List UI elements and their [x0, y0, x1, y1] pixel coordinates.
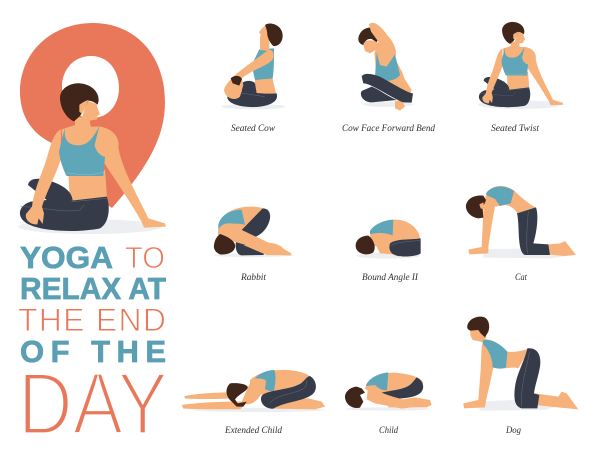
- title line: of the: OF THE: [20, 334, 166, 369]
- title line: yoga to: [20, 240, 165, 275]
- pose: child: [345, 372, 432, 411]
- pose: seated cow: [221, 23, 285, 109]
- pose: seated twist: [478, 22, 563, 109]
- title line: yoga to: YOGA: [20, 240, 113, 275]
- pose: rabbit: [213, 207, 293, 257]
- pose: bound angle II: [356, 220, 421, 259]
- big number nine: [20, 23, 165, 208]
- label: rabbit: Rabbit: [240, 273, 266, 283]
- pose: dog: [463, 317, 578, 411]
- title line: the end: THE END: [18, 302, 166, 338]
- label: seated twist: Seated Twist: [491, 124, 539, 134]
- label: extended child: Extended Child: [224, 426, 282, 436]
- title: [18, 240, 168, 453]
- pose: cow face forward bend: [358, 23, 413, 111]
- label: cow face forward bend: Cow Face Forward Bend: [342, 124, 435, 134]
- label: child: Child: [379, 426, 398, 436]
- label: dog: Dog: [505, 426, 521, 436]
- pose: cat: [466, 186, 576, 258]
- title line: day: DAY: [18, 354, 168, 453]
- label: cat: Cat: [515, 273, 527, 283]
- title line: relax at: RELAX AT: [20, 271, 166, 306]
- label: seated cow: Seated Cow: [231, 124, 276, 134]
- main figure: seated twist: [18, 83, 166, 234]
- title line: yoga to: TO: [125, 240, 165, 275]
- pose: extended child: [182, 370, 325, 412]
- label: bound angle II: Bound Angle II: [362, 273, 419, 283]
